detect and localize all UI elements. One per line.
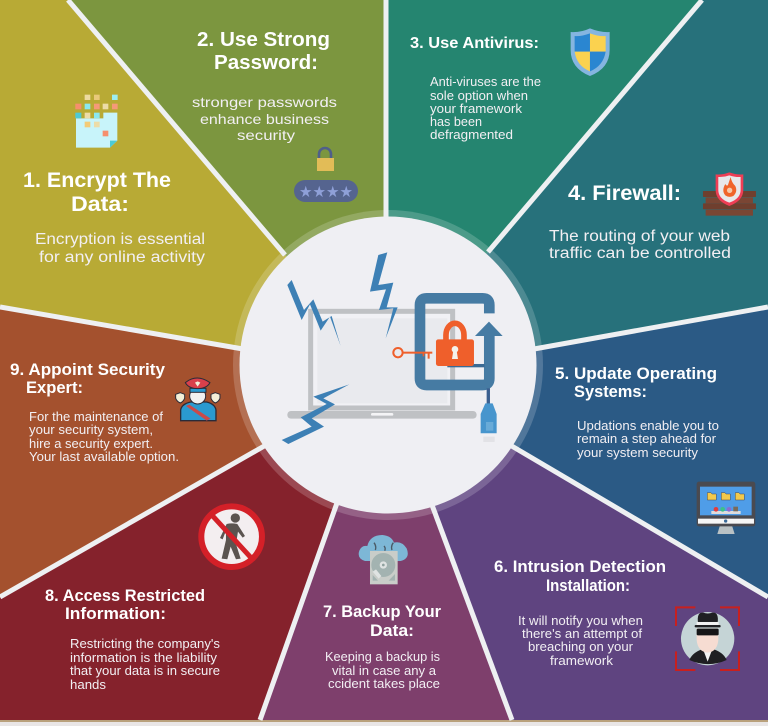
text: security expert body: hire a security expert. xyxy=(29,437,153,451)
heading: 8. Access Restricted Information: 8. Access Restricted xyxy=(45,587,205,605)
panel: 7 backup your data xyxy=(260,365,512,720)
text: antivirus body: your framework xyxy=(430,102,523,116)
icon: security officer xyxy=(176,378,220,421)
heading: 9. Appoint Security Expert: 9. Appoint Security xyxy=(10,361,166,379)
icon: no entry pedestrian sign xyxy=(201,506,262,567)
heading: 1. Encrypt The Data: Data: xyxy=(71,193,129,216)
text: password body: enhance business xyxy=(200,111,329,127)
text: encryption body: Encryption is essential xyxy=(35,231,205,248)
text: update body: remain a step ahead for xyxy=(577,432,716,446)
heading: 7. Backup Your Data: 7. Backup Your xyxy=(323,603,442,621)
heading: 6. Intrusion Detection Installation: Installation: xyxy=(546,577,630,595)
heading: 5. Update Operating Systems: Systems: xyxy=(574,383,647,401)
text: firewall body: The routing of your web xyxy=(549,228,730,245)
icon: padlock and password field: ★★★★ xyxy=(299,183,353,201)
icon: padlock and password field xyxy=(294,148,358,202)
text: update body: Updations enable you to xyxy=(577,419,719,433)
panel: 1 encrypt the data xyxy=(0,0,388,365)
heading: 6. Intrusion Detection Installation: 6. Intrusion Detection xyxy=(494,558,666,576)
central illustration: laptop under attack with lock xyxy=(282,252,503,444)
text: intrusion body: It will notify you when xyxy=(518,614,643,628)
bracket arrow xyxy=(420,298,503,385)
heading: 4. Firewall: 4. Firewall: xyxy=(568,182,681,205)
text: backup body xyxy=(325,650,440,691)
panel: 3 use antivirus xyxy=(386,0,702,365)
icon: shield xyxy=(571,28,610,76)
heading: 6. Intrusion Detection Installation xyxy=(494,558,666,595)
heading: 7. Backup Your Data: Data: xyxy=(370,622,414,640)
heading: 3. Use Antivirus: 3. Use Antivirus: xyxy=(410,35,539,52)
text: password body xyxy=(192,94,337,143)
text: intrusion body: framework xyxy=(550,654,614,668)
text: restricted body: Restricting the company's xyxy=(70,637,220,651)
text: update body: your system security xyxy=(577,446,699,460)
icon: desktop monitor xyxy=(697,482,755,534)
text: password body: security xyxy=(237,127,295,143)
text: backup body: vital in case any a xyxy=(332,664,436,678)
heading: 1. Encrypt The Data xyxy=(23,169,171,216)
panel: 2 use strong password xyxy=(68,0,388,365)
heading: 2. Use Strong Password: 2. Use Strong xyxy=(197,29,330,51)
text: intrusion body xyxy=(518,614,643,668)
icon: brick wall with shield xyxy=(703,172,756,216)
text: restricted body xyxy=(70,637,220,692)
text: update body xyxy=(577,419,719,460)
text: firewall body: traffic can be controlled xyxy=(549,245,731,262)
text: security expert body xyxy=(29,410,179,464)
heading: 5. Update Operating Systems xyxy=(555,365,717,401)
panel: 9 appoint security expert xyxy=(0,307,388,597)
text: antivirus body xyxy=(430,75,541,142)
ring around centre circle xyxy=(233,210,543,520)
text: antivirus body: has been xyxy=(430,115,482,129)
heading: 8. Access Restricted Information: Information: xyxy=(65,605,166,623)
centre circle xyxy=(240,216,536,514)
heading: 7. Backup Your Data xyxy=(323,603,442,640)
text: security expert body: your security system, xyxy=(29,423,153,437)
panel: 4 firewall xyxy=(388,0,768,365)
icon: cloud hard drive xyxy=(359,535,408,584)
icon: spy in target frame xyxy=(676,607,739,670)
panel: 6 intrusion detection installation xyxy=(388,365,768,720)
text: security expert body: Your last available option. xyxy=(29,450,179,464)
heading: 9. Appoint Security Expert xyxy=(10,361,166,397)
text: security expert body: For the maintenance of xyxy=(29,410,164,424)
text: intrusion body: there's an attempt of xyxy=(522,627,643,641)
usb cable xyxy=(481,388,497,442)
text: restricted body: hands xyxy=(70,678,106,692)
heading: 2. Use Strong Password: Password: xyxy=(214,52,318,74)
text: intrusion body: breaching on your xyxy=(528,640,633,654)
heading: 9. Appoint Security Expert: Expert: xyxy=(26,379,83,397)
text: antivirus body: defragmented xyxy=(430,128,513,142)
panel: 8 access restricted information xyxy=(0,365,388,720)
text: firewall body xyxy=(549,228,731,262)
heading: 8. Access Restricted Information xyxy=(45,587,205,623)
icon: encrypted document xyxy=(75,95,118,148)
laptop xyxy=(287,311,477,419)
text: password body: stronger passwords xyxy=(192,94,337,110)
text: backup body: ccident takes place xyxy=(328,677,440,691)
heading: 2. Use Strong Password xyxy=(197,29,330,74)
text: backup body: Keeping a backup is xyxy=(325,650,440,664)
padlock and key xyxy=(393,323,474,366)
text: antivirus body: sole option when xyxy=(430,89,528,103)
lightning bolts xyxy=(282,252,398,444)
panel: 5 update operating systems xyxy=(388,307,768,597)
heading: 1. Encrypt The Data: 1. Encrypt The xyxy=(23,169,171,192)
text: encryption body xyxy=(35,231,205,266)
text: restricted body: information is the liability xyxy=(70,651,218,665)
heading: 5. Update Operating Systems: 5. Update Operating xyxy=(555,365,717,383)
text: restricted body: that your data is in secure xyxy=(70,664,220,678)
text: encryption body: for any online activity xyxy=(39,249,205,266)
text: antivirus body: Anti-viruses are the xyxy=(430,75,541,89)
